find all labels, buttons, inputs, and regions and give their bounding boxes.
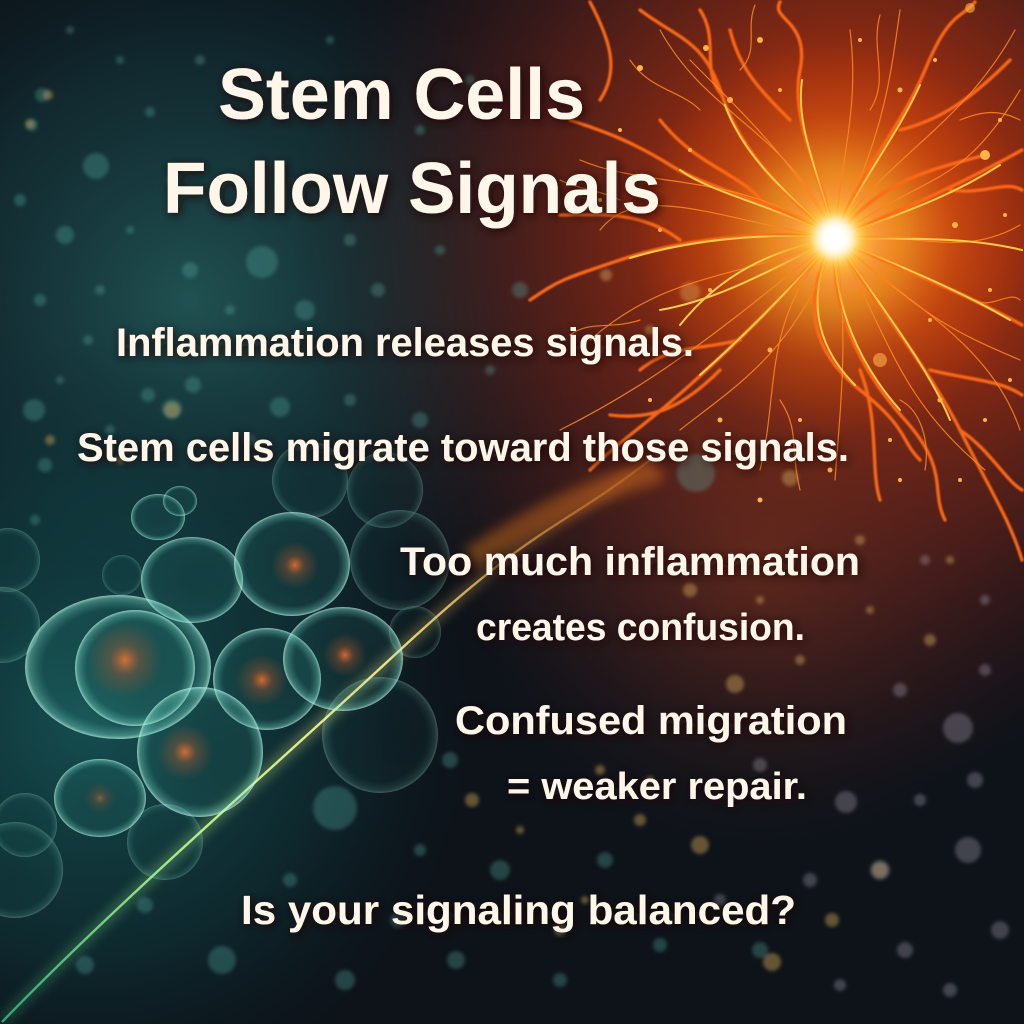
cell: bottom left: [54, 759, 146, 837]
beam of light: [2, 460, 660, 1022]
title: Follow Signals: [163, 149, 661, 229]
cell: upper middle: [234, 512, 350, 616]
line: weaker repair: = weaker repair.: [507, 766, 807, 808]
cell: lower: [137, 687, 263, 817]
yellow filaments: [630, 80, 1022, 420]
sparks: [598, 3, 1012, 502]
title: [163, 55, 661, 229]
fine filaments: [560, 5, 1020, 490]
line: too much inflammation: Too much inflammation: [400, 540, 860, 584]
cell: large: [25, 595, 211, 739]
orange filaments: [530, 2, 1022, 560]
line: inflammation releases signals: Inflammation releases signals.: [116, 321, 694, 365]
cell: right: [283, 607, 403, 711]
cell: centre: [213, 628, 321, 730]
title: Stem Cells: [218, 55, 585, 135]
body text: [77, 321, 860, 933]
signal burst: [530, 2, 1024, 560]
line: creates confusion: creates confusion.: [476, 607, 805, 649]
line: stem cells migrate: Stem cells migrate toward those signals.: [77, 426, 849, 470]
faint cells: [0, 442, 450, 918]
line: question: Is your signaling balanced?: [241, 887, 796, 933]
line: confused migration: Confused migration: [455, 699, 847, 743]
cell: top left: [131, 486, 243, 623]
stem cell cluster: [0, 442, 450, 918]
